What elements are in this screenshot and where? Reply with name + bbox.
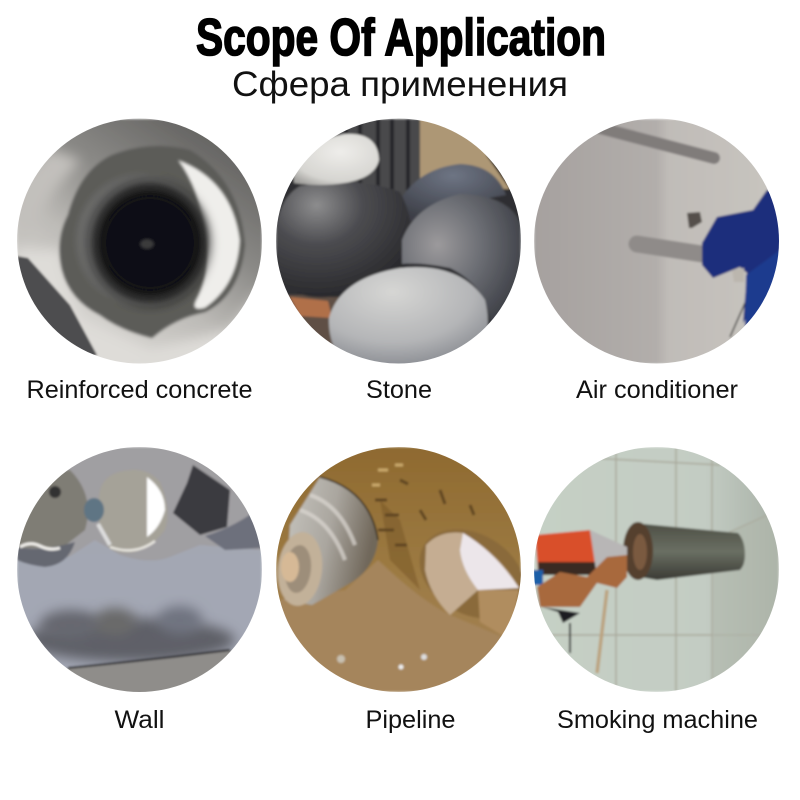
- label: Pipeline: [366, 706, 456, 734]
- photo: core holes in a wall: [534, 119, 785, 364]
- panel: stone: [276, 119, 523, 404]
- label: Smoking machine: [557, 706, 758, 734]
- label: Reinforced concrete: [26, 376, 252, 404]
- photo: drilled hole in concrete: [17, 119, 262, 370]
- label: Air conditioner: [576, 376, 738, 404]
- photo: drill on tiled wall: [533, 447, 779, 700]
- subtitle: Сфера применения: [232, 65, 568, 104]
- panel: wall: [17, 447, 262, 734]
- panel: pipeline: [274, 447, 540, 734]
- photo: concrete wall with holes: [17, 447, 262, 700]
- panel: smoking machine: [533, 447, 779, 734]
- label: Stone: [366, 376, 432, 404]
- photo: smooth boulders: [276, 119, 523, 366]
- panel: reinforced concrete: [17, 119, 262, 404]
- panel: air conditioner: [534, 119, 785, 404]
- title: Scope Of Application: [196, 9, 606, 67]
- photo: core drill cutting a pipe: [274, 447, 540, 692]
- label: Wall: [114, 706, 164, 734]
